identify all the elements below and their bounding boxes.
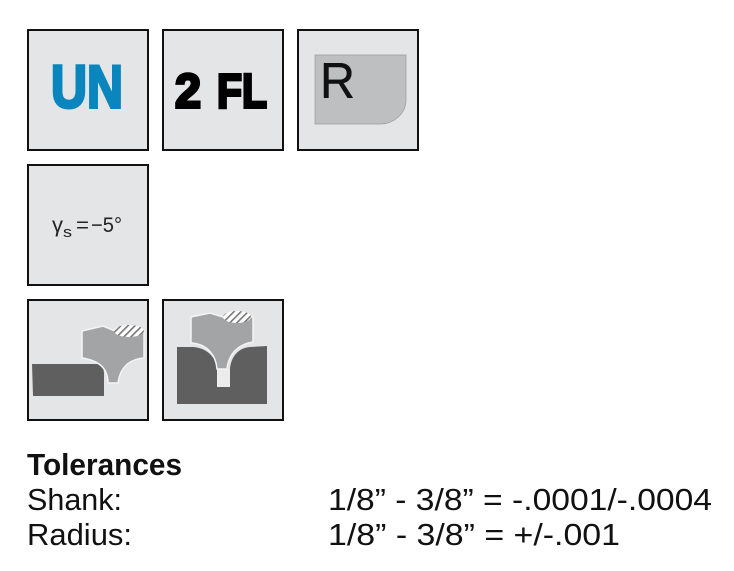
heading: Tolerances: Tolerances [27,447,182,482]
radius profile shape [315,55,406,124]
text: shank tolerance: Shank: [27,482,122,517]
text: radius tolerance: Radius: [27,517,132,552]
label: rake angle value: = [76,214,89,237]
label: UN: UN [51,54,123,120]
label: 2 FL [175,66,267,118]
text: radius tolerance: 1/8” - 3/8” = +/-.001 [328,517,620,552]
label: rake angle value [52,214,122,241]
label: 2 FL: 2 [175,66,201,118]
hatched section [223,311,251,323]
panel: groove milling icon [163,300,283,420]
panel: 2 FL flutes icon [163,30,283,150]
hatched section [114,325,144,337]
panel: side profile milling icon [28,300,148,420]
label: rake angle value: s [63,224,72,241]
text: radius tolerance [27,517,620,552]
label: rake angle value: γ [52,214,64,237]
text: shank tolerance: 1/8” - 3/8” = -.0001/-.0004 [328,482,712,517]
label: R: R [320,53,355,109]
label: 2 FL: FL [217,66,267,118]
cutter [82,326,144,383]
label: rake angle value: −5° [91,214,122,237]
groove [217,369,230,387]
panel: rake angle icon [28,165,148,285]
panel: UN thread icon [28,30,148,150]
cutter [191,313,253,369]
workpiece [177,346,267,404]
panel: radius icon [298,30,418,150]
text: shank tolerance [27,482,712,517]
workpiece [32,364,104,396]
